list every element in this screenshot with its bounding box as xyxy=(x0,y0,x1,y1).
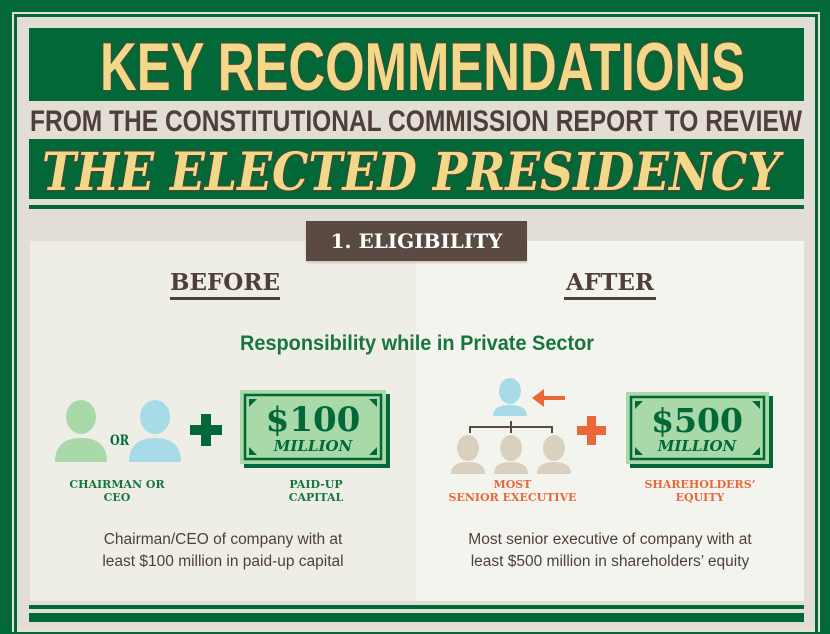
badge: eligibility: 1. ELIGIBILITY xyxy=(331,229,502,253)
panel: after xyxy=(416,241,804,601)
icon: plus green xyxy=(190,414,222,446)
icon: chairman or ceo xyxy=(55,400,181,462)
label: shareholders equity xyxy=(645,478,755,504)
badge: eligibility xyxy=(306,221,527,261)
label: paid-up: CAPITAL xyxy=(289,491,343,504)
icon: bill 100 xyxy=(240,390,390,468)
icon: chairman or ceo: OR xyxy=(110,433,129,449)
text: after description: least $500 million in shareholders’ equity xyxy=(471,553,749,570)
label: most senior executive xyxy=(448,478,576,504)
label: most senior executive: MOST xyxy=(494,478,531,491)
label: chairman xyxy=(69,478,165,504)
icon: bill 100: $100 xyxy=(266,400,360,440)
label: chairman: CEO xyxy=(104,491,130,504)
icon: bill 500: MILLION xyxy=(657,437,738,455)
icon: plus orange xyxy=(577,416,606,445)
heading: before: BEFORE xyxy=(170,269,280,296)
label: shareholders equity: EQUITY xyxy=(676,491,724,504)
label: most senior executive: SENIOR EXECUTIVE xyxy=(448,491,576,504)
text: before description: least $100 million in paid-up capital xyxy=(102,553,344,570)
icon: senior executive hierarchy xyxy=(451,378,571,474)
label: paid-up xyxy=(289,478,343,504)
panel: before xyxy=(30,241,416,601)
label: chairman: CHAIRMAN OR xyxy=(69,478,165,491)
text: after description xyxy=(468,531,752,570)
text: before description: Chairman/CEO of company with at xyxy=(104,531,342,548)
icon: bill 500: $500 xyxy=(651,401,743,440)
icon: bill 500 xyxy=(626,392,773,468)
heading: after: AFTER xyxy=(566,269,654,296)
text: after description: Most senior executive of company with at xyxy=(468,531,752,548)
icon: bill 100: MILLION xyxy=(273,437,354,455)
label: shareholders equity: SHAREHOLDERS’ xyxy=(645,478,755,491)
text: before description xyxy=(102,531,344,570)
label: paid-up: PAID-UP xyxy=(289,478,343,491)
